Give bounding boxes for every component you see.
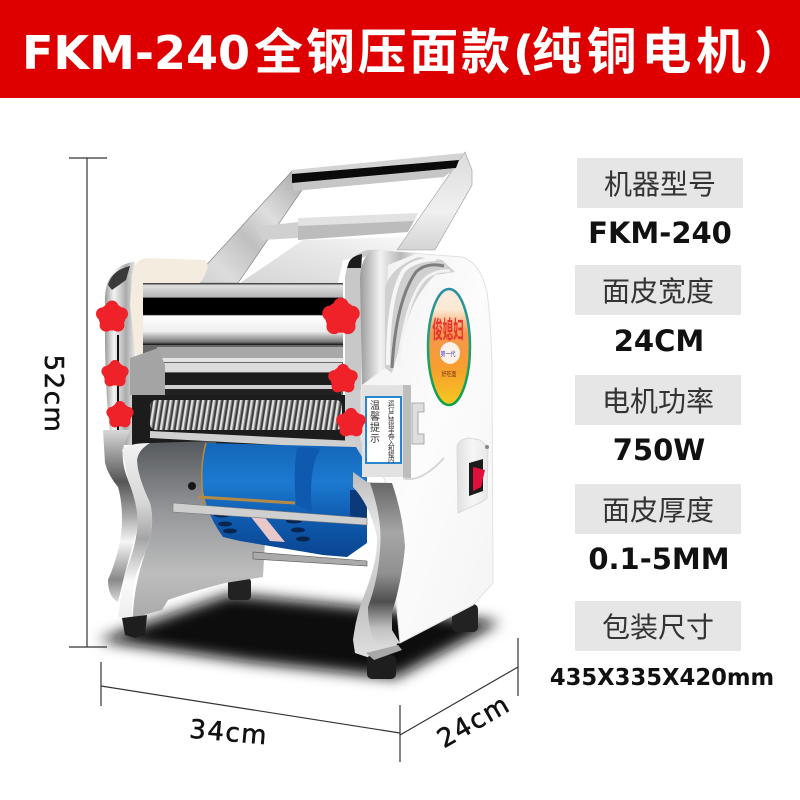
notice body: 将 [388,421,395,430]
title text: 全钢压面款 [254,24,510,81]
spec: sheet width: 24CM [614,324,704,358]
spec panel [550,158,774,691]
notice body: 和 [388,444,394,453]
spec: motor power: 750W [613,433,705,467]
notice body: 内 [388,455,394,464]
cream plate [130,258,208,360]
brand badge [428,289,470,405]
front rod [173,503,367,525]
notice holder [362,385,403,477]
spec: package size [550,601,774,691]
feed tray [190,152,472,283]
notice heading: 馨 [370,410,380,423]
side plate [133,441,265,618]
notice body: 严 [388,410,395,418]
spec: package size: 包装尺寸 [602,612,714,643]
back feet [228,578,478,632]
width label: 34cm [188,715,269,751]
spec: motor power [575,375,741,467]
spec: model: FKM-240 [588,216,732,250]
product photo: noodle press machine [96,152,500,679]
notice body: 入 [388,440,395,447]
knob mid left [101,360,129,386]
notice body: 行 [388,404,395,413]
badge brand text: 俊媳妇 [432,316,464,343]
right front leg [353,472,405,658]
blue motor [188,443,367,557]
shoulder edge [403,458,444,479]
notice body: 辊 [388,449,395,458]
notice body: 手 [388,426,395,436]
lower rollers and rods [130,345,343,400]
notice heading: 温 [370,400,380,412]
power switch [457,438,489,513]
knob low right [336,408,366,436]
notice label [366,397,401,464]
notice body: 伸 [388,432,395,441]
title text: ( [513,26,534,80]
badge lower text: 好吃面 [442,369,457,378]
cutter roller [150,400,342,430]
title text: ） [754,26,800,80]
middle bar [255,213,418,240]
height label: 52cm [38,355,68,433]
spec: model [577,158,743,250]
main roller [143,283,343,345]
knob mid right [328,364,358,392]
curved ribs [385,257,455,373]
adjusting knobs [96,298,366,436]
blade strip [150,431,355,449]
top bar [292,153,463,191]
cutter back [132,395,345,445]
hinge [412,403,424,444]
spec: sheet width [575,265,741,358]
notice body: 禁 [388,416,395,424]
title banner [0,0,800,98]
spec: motor power: 电机功率 [602,386,714,417]
knob top left [96,300,128,332]
knob low left [106,401,134,427]
spec: sheet thickness: 面皮厚度 [602,495,714,526]
dimension: width 34cm [101,662,400,762]
leg inner band [368,483,405,648]
title text: 纯铜电机 [532,23,746,81]
spec: sheet width: 面皮宽度 [602,276,714,307]
spec: model: 机器型号 [604,169,716,200]
front left foot [122,615,147,638]
badge small text: 第一代 [441,349,456,358]
front right foot [366,645,402,679]
spec: sheet thickness: 0.1-5MM [588,542,730,576]
hinge strip [403,385,411,478]
knob top right [322,298,360,334]
leg outer strip [353,472,405,658]
spec: sheet thickness [575,484,741,576]
dimension: height 52cm [38,158,107,647]
title text: FKM-240 [22,26,250,80]
left frame column [105,262,135,445]
dimension: depth 24cm [400,638,518,755]
rear rod [253,552,367,566]
notice heading: 示 [370,434,380,445]
right housing body [361,250,493,643]
floor shadow [98,594,500,678]
notice heading: 提 [370,422,380,434]
housing silver column [345,250,380,390]
depth label: 24cm [432,689,516,755]
spec: package size: 435X335X420mm [550,665,774,691]
frame strip behind notice [345,388,363,476]
left front leg [118,443,152,617]
left back leg [103,430,138,602]
notice body: 运 [388,399,395,407]
housing silver shoulder [360,250,418,385]
